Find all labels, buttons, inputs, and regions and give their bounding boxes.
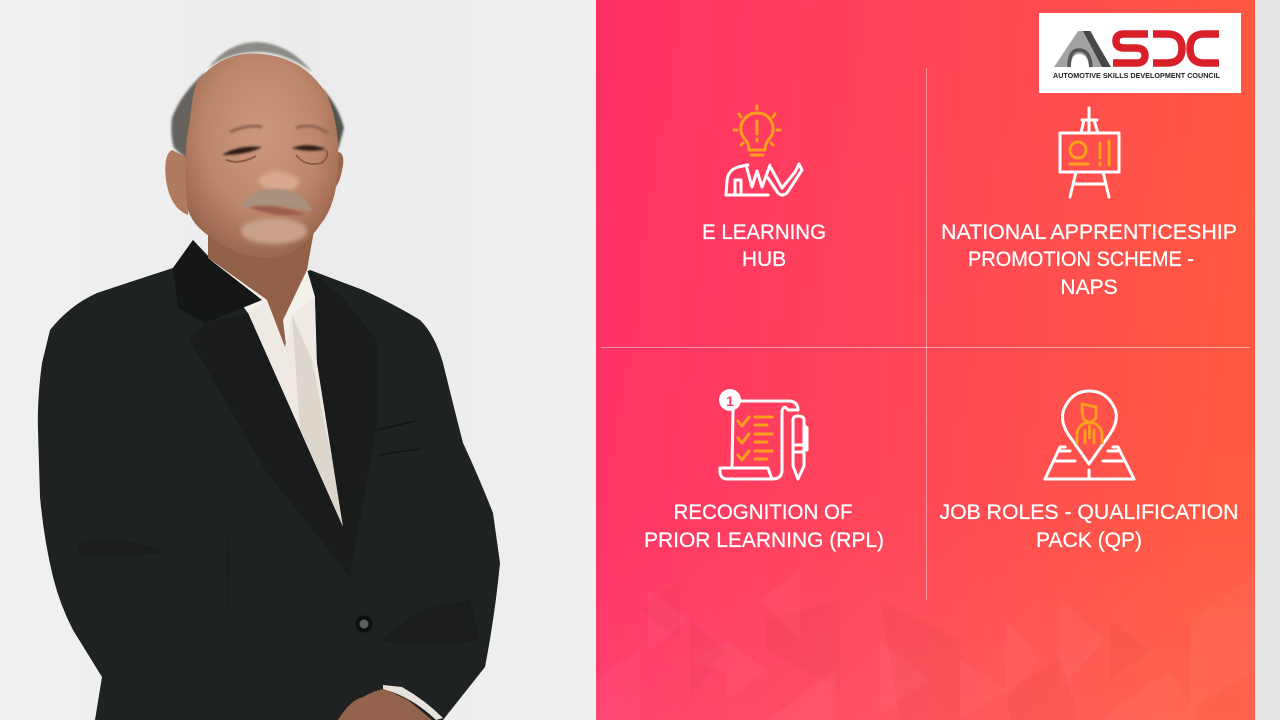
item: E learning hub <box>702 106 826 271</box>
label: RECOGNITION OF <box>674 501 852 524</box>
right lapel <box>310 270 378 575</box>
shirt <box>208 258 343 527</box>
jacket pocket <box>377 421 420 455</box>
face <box>186 54 338 258</box>
item: Job roles <box>940 391 1238 552</box>
horizontal divider <box>601 347 1250 348</box>
label: NATIONAL APPRENTICESHIP <box>941 221 1237 244</box>
triangle pattern <box>596 570 1255 720</box>
left lapel <box>173 240 262 323</box>
hair <box>171 42 344 162</box>
label: PRIOR LEARNING (RPL) <box>644 529 884 552</box>
logo tagline: AUTOMOTIVE SKILLS DEVELOPMENT COUNCIL <box>1053 71 1220 80</box>
eyes <box>222 145 326 155</box>
label: E LEARNING <box>702 221 826 244</box>
neck <box>208 225 315 347</box>
ASDC logo <box>1039 13 1241 93</box>
logo letters SDC <box>1113 34 1219 63</box>
left collar <box>208 258 267 313</box>
hands <box>338 689 432 720</box>
right margin strip <box>1255 0 1280 720</box>
icon number: 1 <box>726 393 734 409</box>
jacket fold shadows <box>78 530 480 645</box>
label: JOB ROLES - QUALIFICATION <box>940 501 1238 524</box>
icon: easel <box>1060 108 1119 197</box>
chin <box>241 218 307 244</box>
moustache <box>241 189 312 212</box>
shirt shadow <box>292 315 343 527</box>
jacket button <box>356 616 372 632</box>
label: PACK (QP) <box>1036 529 1142 552</box>
label: HUB <box>742 248 786 271</box>
nose <box>258 171 299 190</box>
item: RPL <box>644 389 884 552</box>
icon: checklist scroll and pen <box>719 389 807 479</box>
portrait photo of man in dark suit <box>38 42 500 720</box>
photo background <box>0 0 596 720</box>
vertical divider <box>926 68 927 600</box>
icon: light bulb and person <box>726 106 802 195</box>
icon: map pin with worker <box>1045 391 1134 479</box>
item: NAPS <box>941 108 1237 299</box>
logo emblem <box>1054 31 1111 67</box>
right collar <box>283 270 315 345</box>
jacket <box>38 240 500 720</box>
label: PROMOTION SCHEME - <box>968 248 1194 271</box>
ears <box>165 150 192 215</box>
eyebrows <box>230 126 328 133</box>
shirt cuff <box>383 685 443 720</box>
mouth <box>248 206 303 215</box>
label: NAPS <box>1060 276 1118 299</box>
red gradient panel <box>596 0 1255 720</box>
